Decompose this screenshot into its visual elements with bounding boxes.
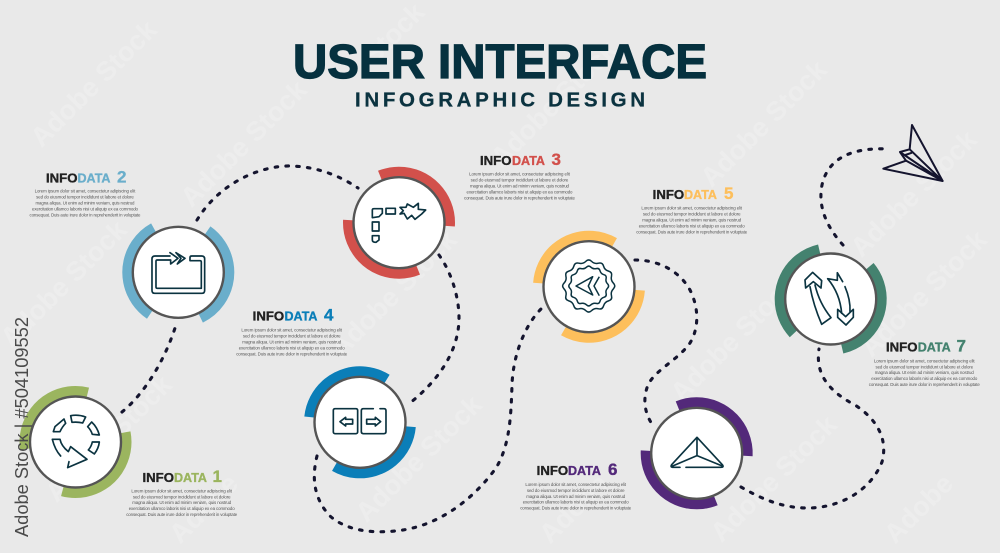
- circle 1: [30, 396, 121, 488]
- ring segments 3: [333, 157, 465, 288]
- ring segments 7: [759, 228, 902, 370]
- text block 6: Lorem ipsum dolor sit amet, consectetur adipiscing elit: [525, 482, 627, 487]
- text: Adobe Stock: [845, 124, 983, 263]
- panel: step 4: [236, 306, 416, 478]
- stock watermark credit: Adobe Stock | #504109552: [12, 317, 32, 537]
- text block 3: magna aliqua. Ut enim ad minim veniam, quis nostrud: [470, 183, 570, 188]
- text block 3: 3: [552, 150, 561, 169]
- text block 7: 7: [956, 337, 966, 356]
- text: Adobe Stock: [175, 74, 313, 213]
- text block 3: Lorem ipsum dolor sit amet, consectetur adipiscing elit: [469, 172, 571, 177]
- text: Adobe: [163, 468, 244, 549]
- text block 4: exercitation ullamco laboris nisi ut aliquip ex ea commodo: [239, 345, 345, 350]
- text block 1: 1: [212, 467, 222, 486]
- text block 7: magna aliqua. Ut enim ad minim veniam, quis nostrud: [875, 370, 974, 375]
- icon: triangular pyramid: [671, 437, 723, 467]
- text block 4: DATA: [284, 309, 318, 324]
- text block 6: magna aliqua. Ut enim ad minim veniam, quis nostrud: [526, 494, 626, 499]
- text block 3: consequat. Duis aute irure dolor in reprehenderit in voluptate: [464, 195, 576, 200]
- text block 7: DATA: [918, 340, 951, 355]
- icon: paper plane: [883, 125, 943, 181]
- ring segments 2: [108, 202, 249, 343]
- text block 2: magna aliqua. Ut enim ad minim veniam, quis nostrud: [36, 200, 135, 205]
- text: Adobe Stock: [665, 269, 803, 408]
- text block 6: DATA: [568, 463, 602, 478]
- text block 1: DATA: [174, 470, 208, 485]
- text block 7: consequat. Duis aute irure dolor in reprehenderit in voluptate: [869, 382, 980, 387]
- circle 3: [354, 177, 444, 268]
- text block 2: sed do eiusmod tempor incididunt ut labore et dolore: [36, 195, 134, 200]
- circle 4: [314, 377, 406, 468]
- text block 4: consequat. Duis aute irure dolor in reprehenderit in voluptate: [236, 351, 348, 356]
- text block 1: INFO: [142, 470, 174, 485]
- text block 4: INFO: [253, 309, 284, 324]
- text block 4: sed do eiusmod tempor incididunt ut labore et dolore: [243, 334, 341, 339]
- circle 6: [651, 408, 742, 499]
- text block 3: DATA: [512, 153, 546, 168]
- dashed connector 5 to 6: [635, 260, 697, 427]
- circle 5: [544, 241, 634, 332]
- text block 4: Lorem ipsum dolor sit amet, consectetur adipiscing elit: [241, 328, 343, 333]
- icon: circular refresh arrows: [805, 272, 853, 325]
- text block 7: Lorem ipsum dolor sit amet, consectetur adipiscing elit: [874, 358, 975, 363]
- text block 2: exercitation ullamco laboris nisi ut aliquip ex ea commodo: [32, 206, 139, 211]
- text block 6: INFO: [537, 463, 568, 478]
- panel: step 2: [30, 168, 249, 343]
- text block 3: [464, 150, 576, 200]
- text block 6: 6: [608, 460, 617, 479]
- dashed connector 1 to 2: [122, 325, 176, 412]
- text block 1: magna aliqua. Ut enim ad minim veniam, quis nostrud: [132, 500, 232, 505]
- icon: dashed corner arrow: [372, 203, 426, 242]
- text block 7: INFO: [886, 340, 918, 355]
- text block 1: Lorem ipsum dolor sit amet, consectetur adipiscing elit: [131, 488, 233, 493]
- text block 1: exercitation ullamco laboris nisi ut aliquip ex ea commodo: [129, 506, 235, 511]
- text block 5: 5: [724, 184, 733, 203]
- circle 2: [133, 227, 224, 318]
- text block 4: magna aliqua. Ut enim ad minim veniam, quis nostrud: [242, 340, 342, 345]
- icon: loop rectangle arrow: [152, 253, 205, 293]
- text block 2: [30, 168, 141, 217]
- text block 2: DATA: [78, 171, 111, 186]
- panel: step 3: [333, 150, 576, 288]
- text block 3: INFO: [480, 153, 512, 168]
- text block 6: exercitation ullamco laboris nisi ut aliquip ex ea commodo: [523, 500, 629, 505]
- icon: wavy badge with double chevron: [563, 260, 615, 312]
- subtitle: INFOGRAPHIC DESIGN: [355, 88, 645, 112]
- text block 2: Lorem ipsum dolor sit amet, consectetur adipiscing elit: [35, 189, 136, 194]
- text block 5: exercitation ullamco laboris nisi ut aliquip ex ea commodo: [639, 223, 745, 228]
- text block 5: sed do eiusmod tempor incididunt ut labore et dolore: [643, 212, 741, 217]
- text block 1: [126, 467, 238, 517]
- text block 1: consequat. Duis aute irure dolor in reprehenderit in voluptate: [126, 512, 238, 517]
- ring segments 5: [535, 233, 643, 341]
- text block 3: exercitation ullamco laboris nisi ut aliquip ex ea commodo: [466, 189, 573, 194]
- text block 7: sed do eiusmod tempor incididunt ut labore et dolore: [875, 364, 974, 369]
- text block 6: consequat. Duis aute irure dolor in reprehenderit in voluptate: [520, 506, 632, 511]
- text block 4: 4: [324, 306, 334, 325]
- panel: step 7: [759, 228, 980, 387]
- ring segments 1: [16, 383, 135, 501]
- text block 5: magna aliqua. Ut enim ad minim veniam, quis nostrud: [642, 217, 742, 222]
- text block 5: Lorem ipsum dolor sit amet, consectetur adipiscing elit: [641, 206, 743, 211]
- text block 6: [520, 460, 632, 511]
- text block 2: consequat. Duis aute irure dolor in reprehenderit in voluptate: [30, 212, 141, 217]
- text block 7: exercitation ullamco laboris nisi ut aliquip ex ea commodo: [871, 376, 978, 381]
- text block 7: [869, 337, 980, 387]
- dashed connector 4 to 5: [314, 309, 541, 532]
- text block 4: [236, 306, 348, 356]
- text: Adobe Stock: [855, 224, 993, 363]
- dashed connector 3 to 4: [410, 255, 459, 403]
- text: Adobe Stock: [40, 369, 178, 508]
- panel: step 1: [16, 383, 238, 517]
- dashed connector 6 to 7: [741, 349, 884, 508]
- ring segments 6: [631, 388, 762, 519]
- text block 5: INFO: [653, 187, 684, 202]
- text block 5: [636, 184, 748, 234]
- text: Adobe Stock: [350, 389, 488, 528]
- text: Adobe Stock: [485, 34, 623, 173]
- dashed connector 2 to 3: [197, 166, 358, 220]
- text block 6: sed do eiusmod tempor incididunt ut labore et dolore: [527, 488, 625, 493]
- icon: circular dashed arrow: [52, 415, 99, 468]
- text: Adobe: [878, 468, 959, 549]
- text block 2: INFO: [46, 171, 78, 186]
- text block 1: sed do eiusmod tempor incididunt ut labore et dolore: [133, 494, 231, 499]
- text: Adobe Stock: [25, 14, 163, 153]
- panel: step 5: [535, 184, 748, 341]
- text block 3: sed do eiusmod tempor incididunt ut labore et dolore: [471, 178, 569, 183]
- text: Adobe: [533, 468, 614, 549]
- circle 7: [785, 254, 876, 344]
- panel: step 6: [520, 388, 762, 519]
- text block 5: consequat. Duis aute irure dolor in reprehenderit in voluptate: [636, 229, 748, 234]
- icon: left and right arrow keys: [333, 409, 386, 434]
- text: Adobe Stock: [695, 54, 833, 193]
- ring segments 4: [304, 367, 416, 478]
- text block 2: 2: [117, 168, 126, 187]
- dashed connector 7 to plane: [821, 149, 890, 245]
- text: Adobe Stock: [325, 224, 463, 363]
- text: Adobe Stock: [705, 409, 843, 548]
- title: USER INTERFACE: [293, 36, 707, 89]
- text block 5: DATA: [684, 187, 718, 202]
